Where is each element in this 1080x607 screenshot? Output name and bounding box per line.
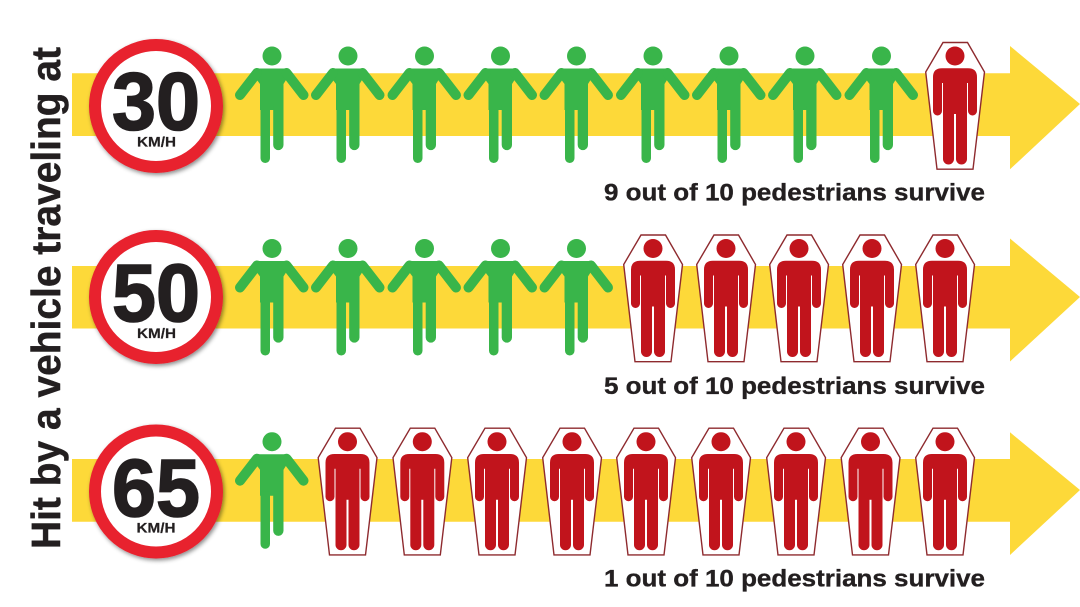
arrow: row 3 [72,432,1080,555]
speed sign 65: KM/H [136,521,176,536]
panel: row 65 km/h [72,428,1080,593]
speed sign 30 [95,45,217,167]
pedestrians: 9 green survivors, 1 red coffin [240,42,984,169]
caption row 3: 1 out of 10 pedestrians survive [604,566,985,593]
pedestrians: 5 green survivors, 5 red coffins [240,235,974,362]
caption row 1: 9 out of 10 pedestrians survive [604,180,985,207]
pedestrians: 1 green survivor, 9 red coffins [240,428,974,555]
panel: row 30 km/h [72,42,1080,207]
speed sign 50 [95,236,217,358]
caption row 2: 5 out of 10 pedestrians survive [604,373,985,400]
speed sign 65 [95,430,217,552]
arrow: row 1 [72,46,1080,169]
speed sign 50: 50 [112,248,200,339]
vertical heading: Hit by a vehicle traveling at [23,47,69,549]
speed sign 30: 30 [112,56,200,148]
arrow: row 2 [72,238,1080,362]
speed sign 65: 65 [112,443,200,534]
panel: row 50 km/h [72,235,1080,400]
speed sign 50: KM/H [137,326,176,341]
speed sign 30: KM/H [137,135,176,150]
